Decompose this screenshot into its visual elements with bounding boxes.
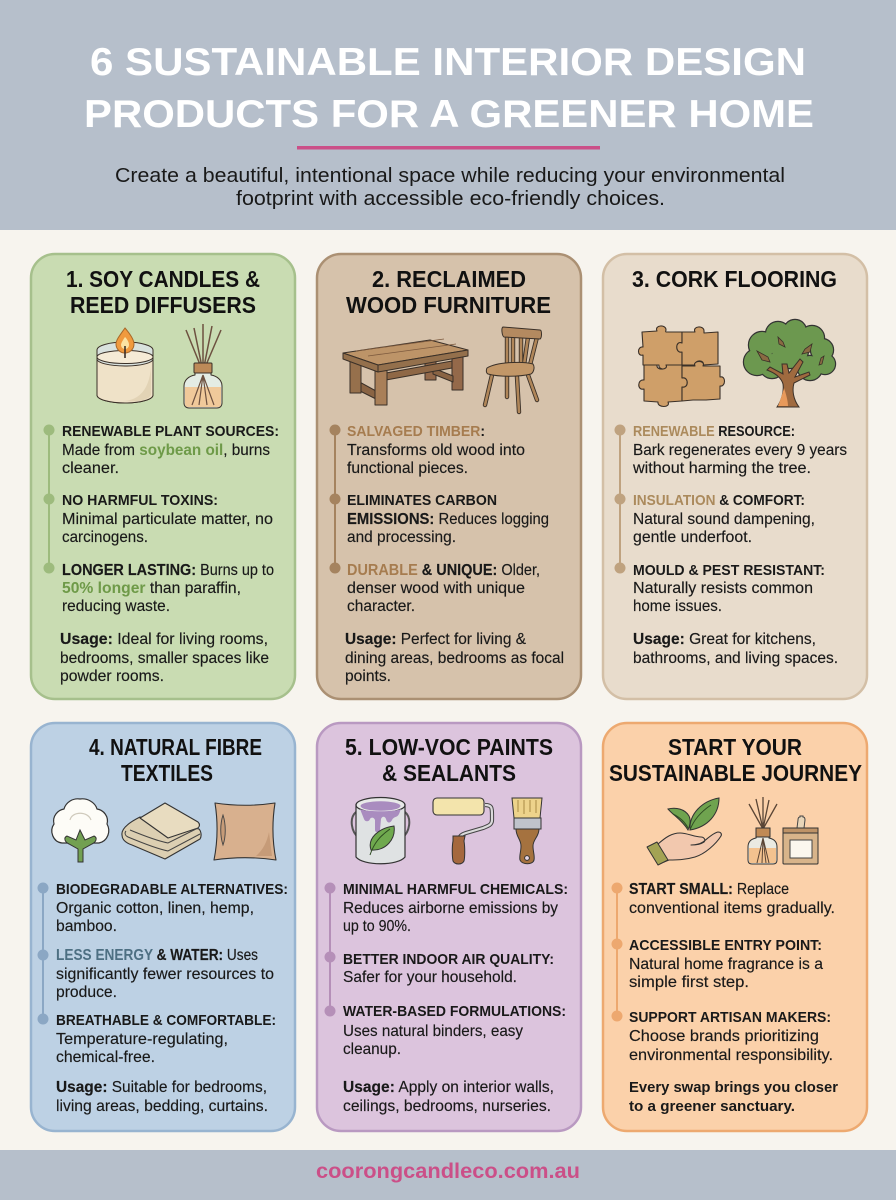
heading: & SEALANTS — [382, 760, 516, 786]
point: minimal harmful chemicals — [343, 881, 568, 935]
icon: folded linen — [122, 803, 201, 859]
usage note: ceilings, bedrooms, nurseries. — [343, 1098, 551, 1115]
point: less energy and water: LESS ENERGY & WATER: Uses — [56, 947, 258, 964]
heading: REED DIFFUSERS — [70, 292, 256, 318]
point: accessible entry point — [629, 937, 823, 991]
heading — [345, 734, 553, 786]
panel: reclaimed wood furniture — [317, 254, 581, 699]
usage note: Usage: Apply on interior walls, — [343, 1079, 554, 1096]
point: longer lasting: reducing waste. — [62, 598, 170, 615]
header banner — [0, 0, 896, 230]
point: support artisan makers: environmental responsibility. — [629, 1047, 833, 1064]
point: minimal harmful chemicals: up to 90%. — [343, 918, 411, 935]
panel: soy candles and reed diffusers — [31, 254, 295, 699]
panel: cork flooring — [603, 254, 867, 699]
point: eliminates carbon emissions — [347, 492, 549, 546]
heading — [89, 734, 262, 786]
timeline markers — [324, 882, 336, 1016]
point: water-based formulations — [343, 1003, 566, 1058]
timeline markers — [612, 882, 622, 1022]
icon: cork oak tree — [744, 320, 835, 407]
point: salvaged timber: functional pieces. — [347, 460, 468, 477]
point: no harmful toxins: carcinogens. — [62, 529, 148, 546]
point: renewable resource — [632, 423, 847, 477]
closing message: to a greener sanctuary. — [629, 1098, 795, 1115]
icon: reed diffuser — [184, 324, 222, 408]
point: insulation and comfort: gentle underfoot. — [633, 529, 752, 546]
subtitle — [115, 165, 785, 210]
point: breathable and comfortable: Temperature-regulating, — [56, 1031, 228, 1048]
point: water-based formulations: Uses natural binders, easy — [343, 1023, 523, 1040]
timeline markers — [614, 424, 626, 574]
point: renewable plant sources: cleaner. — [62, 460, 119, 477]
point: accessible entry point: simple first step. — [629, 974, 749, 991]
icon: candle — [97, 328, 153, 403]
icon: paint brush — [512, 798, 542, 864]
point: breathable and comfortable: chemical-free. — [56, 1049, 155, 1066]
point: durable and unique: DURABLE & UNIQUE: Older, — [347, 562, 540, 579]
panel: start your sustainable journey — [603, 723, 867, 1131]
point: accessible entry point: ACCESSIBLE ENTRY POINT: — [629, 937, 822, 954]
icon: wood chair — [485, 327, 542, 412]
heading — [346, 266, 551, 318]
icon: cork puzzle tiles — [638, 326, 724, 406]
icon: paint roller — [433, 798, 492, 864]
point: renewable plant sources: Made from soybean oil, burns — [62, 442, 270, 459]
point: minimal harmful chemicals: MINIMAL HARMFUL CHEMICALS: — [343, 881, 568, 898]
point: breathable and comfortable: BREATHABLE & COMFORTABLE: — [56, 1012, 276, 1029]
point: support artisan makers: Choose brands prioritizing — [629, 1028, 819, 1045]
point: less energy and water: produce. — [56, 984, 117, 1001]
timeline markers — [38, 882, 48, 1024]
point: support artisan makers — [629, 1009, 833, 1064]
title underline — [297, 146, 600, 150]
point: no harmful toxins: NO HARMFUL TOXINS: — [62, 492, 218, 509]
point: salvaged timber — [347, 423, 525, 477]
point: durable and unique — [347, 562, 540, 615]
point: salvaged timber: SALVAGED TIMBER: — [347, 423, 485, 440]
usage note: living areas, bedding, curtains. — [56, 1098, 268, 1115]
point: minimal harmful chemicals: Reduces airborne emissions by — [343, 900, 558, 917]
subtitle: Create a beautiful, intentional space while reducing your environmental — [115, 165, 785, 187]
heading: 4. NATURAL FIBRE — [89, 734, 262, 760]
usage note: dining areas, bedrooms as focal — [345, 650, 564, 667]
subtitle: footprint with accessible eco-friendly choices. — [236, 188, 665, 210]
usage note: Usage: Perfect for living & — [345, 631, 526, 648]
point: mould and pest resistant: Naturally resists common — [633, 580, 813, 597]
usage note — [56, 1079, 268, 1115]
point: start small: START SMALL: Replace — [629, 881, 789, 898]
title: 6 SUSTAINABLE INTERIOR DESIGN — [90, 41, 806, 84]
closing message: Every swap brings you closer — [629, 1079, 838, 1096]
point: start small — [629, 881, 835, 917]
point: less energy and water: significantly fewer resources to — [56, 966, 274, 983]
usage note: powder rooms. — [60, 668, 164, 685]
icon: cotton boll — [52, 799, 109, 862]
point: better indoor air quality: BETTER INDOOR AIR QUALITY: — [343, 951, 554, 968]
heading: WOOD FURNITURE — [346, 292, 551, 318]
point: insulation and comfort: Natural sound dampening, — [633, 511, 815, 528]
point: eliminates carbon emissions: EMISSIONS: Reduces logging — [347, 511, 549, 528]
point: better indoor air quality — [343, 951, 554, 986]
icon: wood table — [343, 339, 468, 405]
point: no harmful toxins: Minimal particulate matter, no — [62, 511, 273, 528]
point: biodegradable alternatives — [56, 881, 288, 935]
usage note — [343, 1079, 554, 1115]
heading: 2. RECLAIMED — [372, 266, 526, 292]
point: biodegradable alternatives: BIODEGRADABLE ALTERNATIVES: — [56, 881, 288, 898]
usage note: Usage: Great for kitchens, — [633, 631, 816, 648]
usage note — [633, 631, 838, 667]
icon: diffuser and candle box — [748, 797, 818, 864]
usage note: bedrooms, smaller spaces like — [60, 650, 269, 667]
point: renewable resource: RENEWABLE RESOURCE: — [633, 423, 795, 440]
point: durable and unique: denser wood with unique — [347, 580, 525, 597]
website link text: coorongcandleco.com.au — [316, 1160, 580, 1183]
closing message — [629, 1079, 838, 1115]
heading: 5. LOW-VOC PAINTS — [345, 734, 553, 760]
usage note: bathrooms, and living spaces. — [633, 650, 838, 667]
icon: hand holding seedling — [647, 798, 721, 865]
point: eliminates carbon emissions: and processing. — [347, 529, 456, 546]
point: breathable and comfortable — [56, 1012, 276, 1066]
panel: low-voc paints and sealants — [317, 723, 581, 1131]
point: biodegradable alternatives: Organic cotton, linen, hemp, — [56, 900, 254, 917]
heading: START YOUR — [668, 734, 802, 760]
point: eliminates carbon emissions: ELIMINATES CARBON — [347, 492, 497, 509]
point: renewable resource: without harming the tree. — [632, 460, 811, 477]
point: support artisan makers: SUPPORT ARTISAN MAKERS: — [629, 1009, 831, 1026]
point: mould and pest resistant: MOULD & PEST RESISTANT: — [633, 562, 825, 579]
point: renewable resource: Bark regenerates every 9 years — [633, 442, 847, 459]
point: start small: conventional items gradually. — [629, 900, 835, 917]
usage note — [345, 631, 564, 685]
heading: TEXTILES — [121, 760, 213, 786]
point: durable and unique: character. — [347, 598, 415, 615]
timeline markers — [44, 424, 54, 574]
point: salvaged timber: Transforms old wood into — [347, 442, 525, 459]
point: longer lasting: 50% longer than paraffin, — [62, 580, 241, 597]
usage note — [60, 631, 269, 685]
heading: 3. CORK FLOORING — [632, 266, 837, 292]
timeline markers — [330, 424, 340, 574]
point: renewable plant sources: RENEWABLE PLANT SOURCES: — [62, 423, 279, 440]
point: insulation and comfort: INSULATION & COMFORT: — [633, 492, 805, 509]
title — [84, 41, 814, 136]
point: water-based formulations: cleanup. — [343, 1041, 401, 1058]
heading — [609, 734, 862, 786]
heading: 1. SOY CANDLES & — [66, 266, 260, 292]
heading: SUSTAINABLE JOURNEY — [609, 760, 862, 786]
point: renewable plant sources — [62, 423, 279, 477]
title: PRODUCTS FOR A GREENER HOME — [84, 93, 814, 136]
point: insulation and comfort — [633, 492, 815, 546]
panel: natural fibre textiles — [31, 723, 295, 1131]
icon: paint can — [352, 798, 409, 864]
point: water-based formulations: WATER-BASED FORMULATIONS: — [343, 1003, 566, 1020]
usage note: Usage: Suitable for bedrooms, — [56, 1079, 267, 1096]
point: better indoor air quality: Safer for your household. — [343, 969, 517, 986]
footer banner — [0, 1150, 896, 1200]
point: mould and pest resistant: home issues. — [633, 598, 722, 615]
usage note: Usage: Ideal for living rooms, — [60, 631, 268, 648]
point: longer lasting: LONGER LASTING: Burns up to — [62, 562, 274, 579]
point: less energy and water — [56, 947, 274, 1001]
heading — [66, 266, 260, 318]
usage note: points. — [345, 668, 391, 685]
point: accessible entry point: Natural home fragrance is a — [629, 956, 823, 973]
point: mould and pest resistant — [633, 562, 825, 615]
point: longer lasting — [62, 562, 274, 615]
point: biodegradable alternatives: bamboo. — [56, 918, 117, 935]
icon: pillow — [214, 803, 276, 860]
point: no harmful toxins — [62, 492, 273, 546]
